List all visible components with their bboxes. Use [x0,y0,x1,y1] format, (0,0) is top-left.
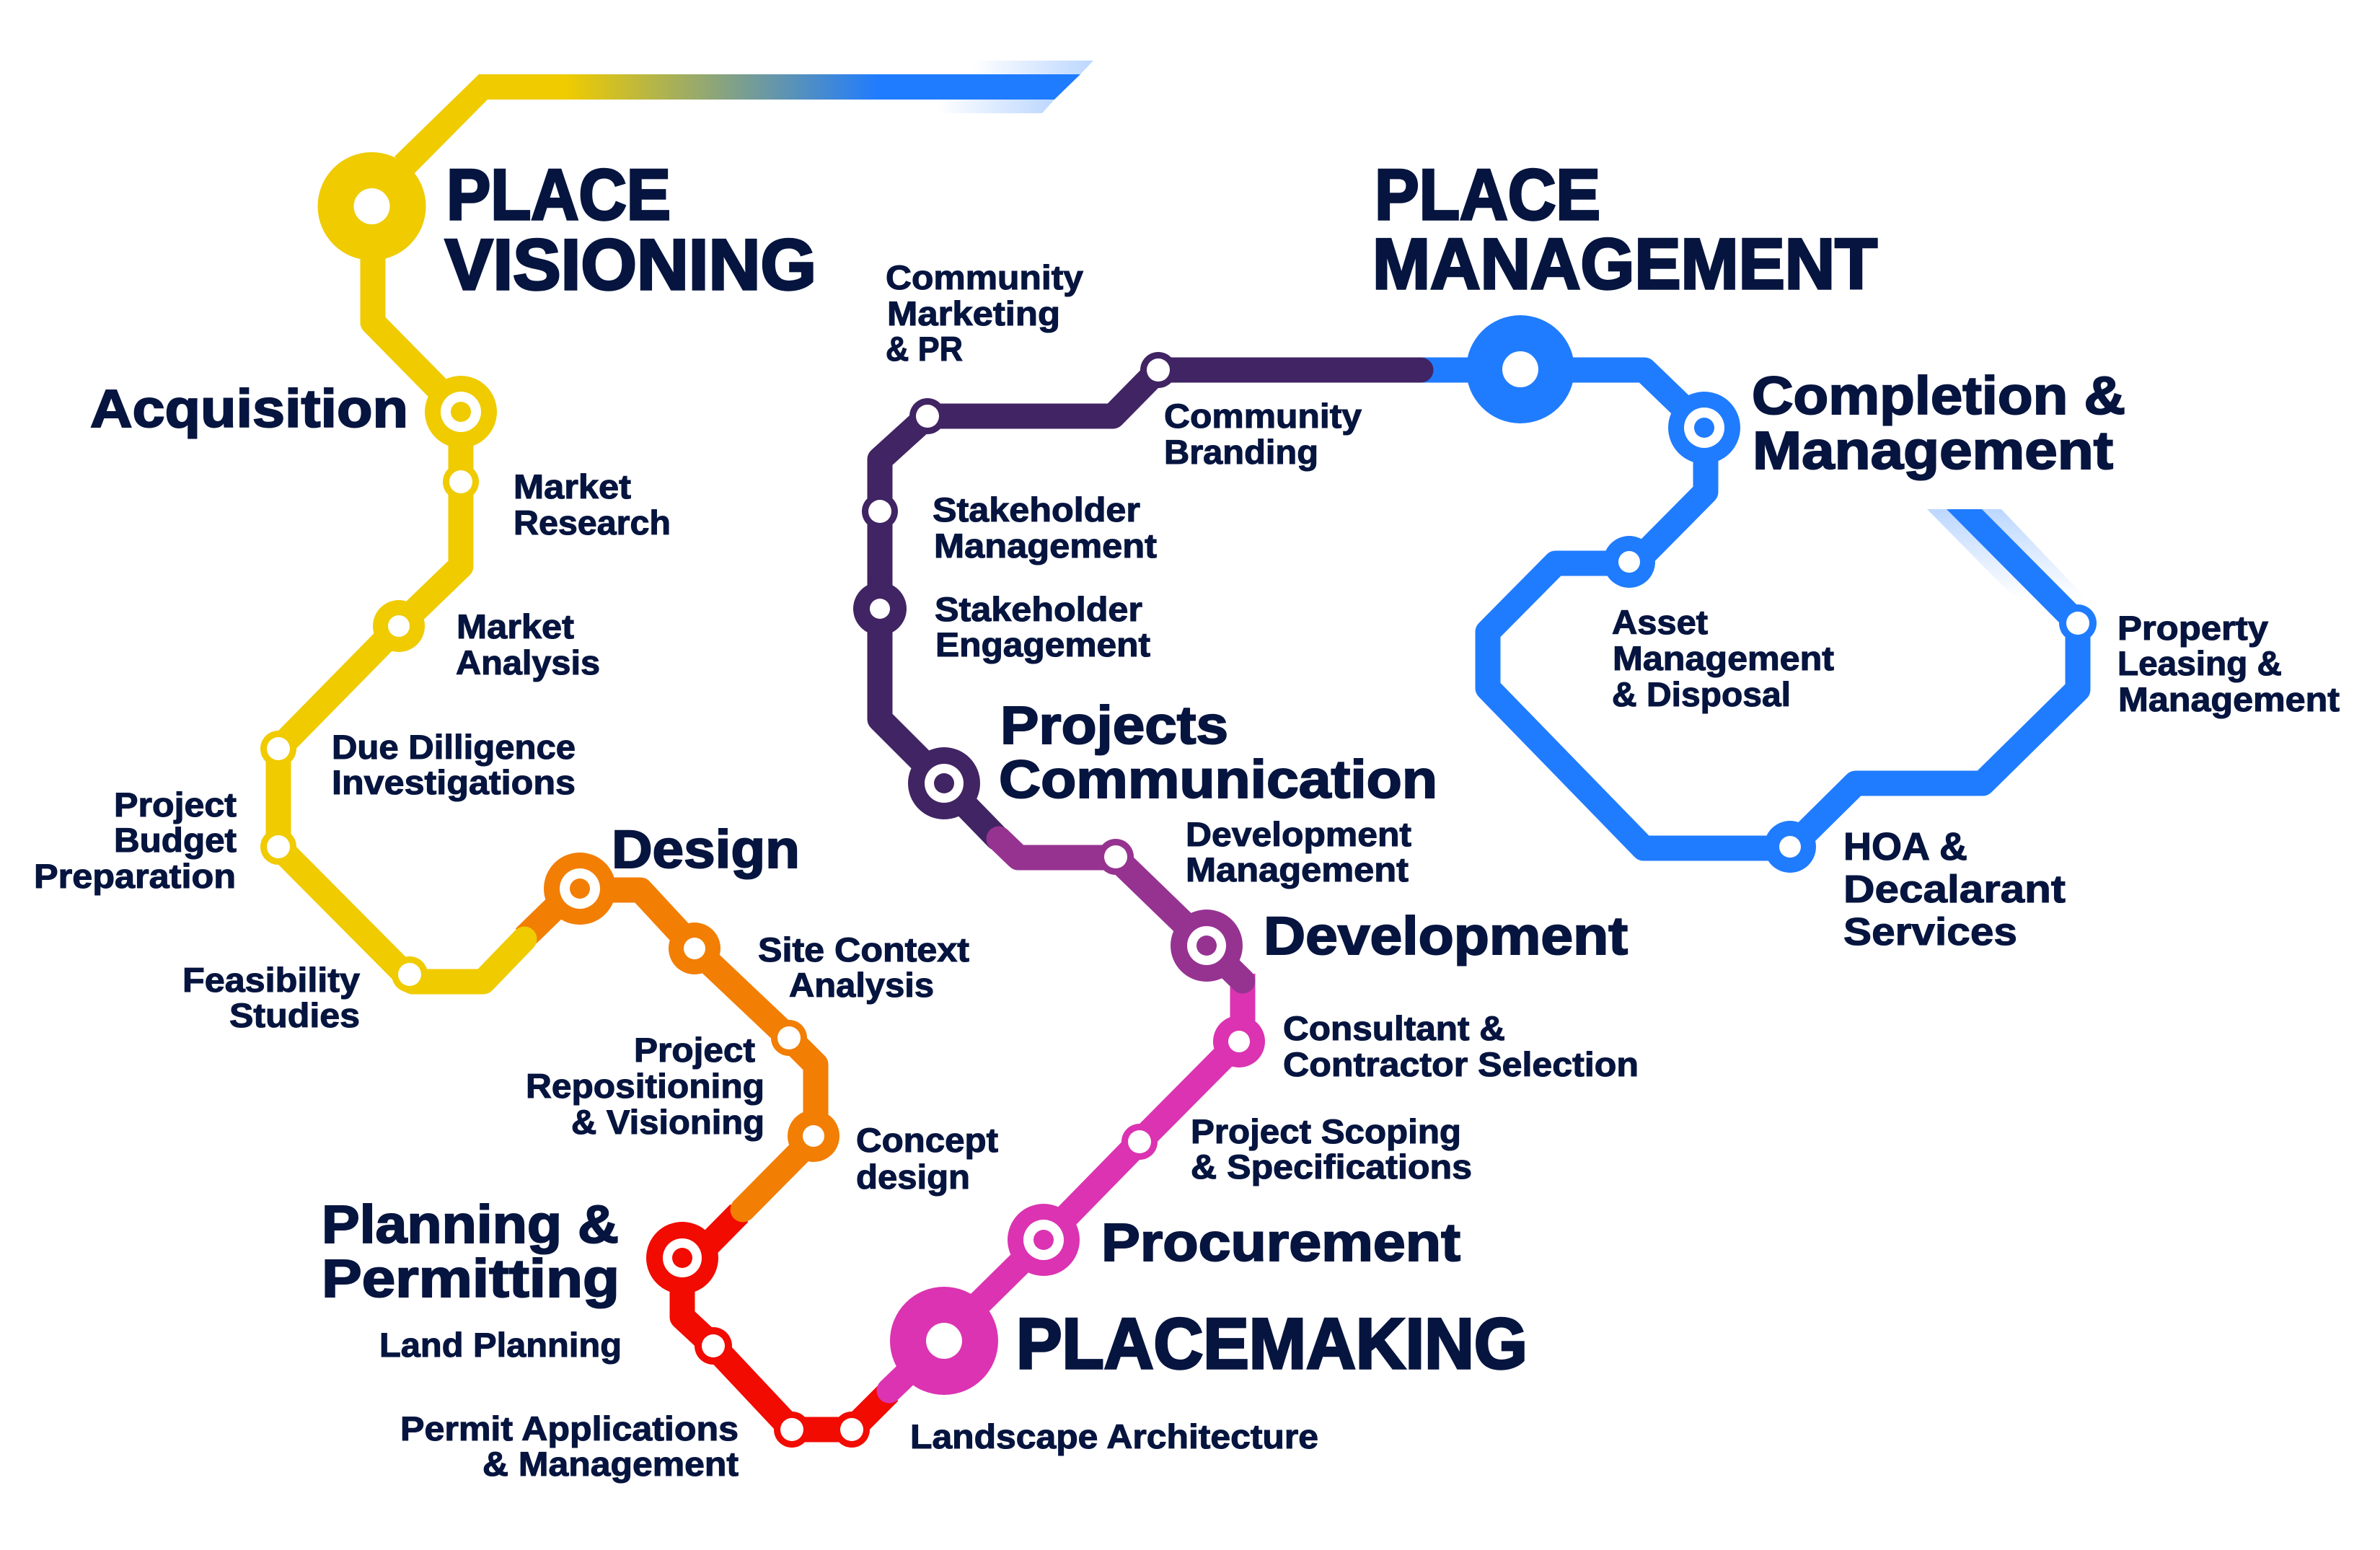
label: Site Context Analysis: Site Context [758,930,969,969]
label: Concept design: design [856,1158,970,1196]
label: Due Dilligence Investigations [332,728,576,801]
label: Feasibility Studies: Feasibility [182,961,360,999]
label: Market Analysis: Analysis [456,643,600,682]
label: Concept design: Concept [856,1121,998,1159]
station: Stakeholder Engagement [853,582,907,635]
heading: Place Visioning: PLACE [446,154,671,234]
label: HOA & Decalarant Services: HOA & [1843,825,1967,868]
label: Site Context Analysis: Analysis [789,966,934,1004]
label: Planning & Permitting [322,1194,620,1308]
label: Procurement: Procurement [1101,1212,1460,1272]
label: Stakeholder Management: Stakeholder [933,490,1140,529]
station: Project Repositioning [771,1020,807,1056]
label: Community Marketing & PR: Community [886,258,1083,296]
label: Stakeholder Engagement: Stakeholder [935,590,1142,628]
station: Feasibility Studies [392,956,428,992]
label: Due Dilligence Investigations: Investigations [332,763,576,801]
label: Community Marketing & PR [886,258,1083,368]
label: Development Management [1186,815,1411,889]
label: Projects Communication [999,695,1437,809]
red line: planning and permitting [646,1213,889,1448]
label: Project Scoping & Specifications: Project Scoping [1191,1112,1461,1150]
label: HOA & Decalarant Services: Decalarant [1843,868,2066,911]
label: Completion & Management: Completion & [1752,366,2125,426]
label: Stakeholder Management: Management [934,527,1157,565]
station: Market Analysis [373,600,425,652]
label: Project Budget Preparation: Preparation [34,857,236,895]
station: Project Budget [260,829,296,865]
label: Market Research: Research [514,503,671,542]
label: Completion & Management [1752,366,2125,480]
label: Market Research: Market [514,467,631,506]
station: Land Planning [695,1327,732,1365]
label: Project Budget Preparation: Project [114,785,237,824]
station: Site Context Analysis [669,922,720,974]
station: Place Visioning [317,152,426,260]
label: Project Budget Preparation: Budget [114,821,237,859]
blue line: place management [1414,315,2099,873]
label: Project Repositioning & Visioning: Repositioning [526,1067,764,1105]
label: Consultant & Contractor Selection: Contractor Selection [1283,1045,1639,1083]
label: Market Analysis [456,607,600,682]
label: Landscape Architecture: Landscape Architecture [910,1417,1318,1456]
yellow line: place visioning [260,61,1093,992]
station: Community Branding [1140,352,1176,388]
label: Property Leasing & Management: Leasing & [2117,644,2282,682]
station: Acquisition [425,376,497,448]
label: Feasibility Studies: Studies [229,996,360,1034]
label: Due Dilligence Investigations: Due Dilligence [332,728,576,766]
label: Development Management: Development [1186,815,1411,853]
heading: Place Visioning: VISIONING [445,224,816,304]
label: Projects Communication: Projects [1000,695,1228,755]
heading: Place Management: PLACE [1375,154,1600,234]
label: Site Context Analysis [758,930,969,1004]
label: Design: Design [612,819,800,879]
magenta line: placemaking [889,974,1265,1395]
label: Development: Development [1264,906,1628,966]
heading: Placemaking: PLACEMAKING [1016,1303,1528,1383]
heading: Place Management: MANAGEMENT [1372,224,1877,304]
label: Development Management: Management [1186,850,1409,889]
label: Project Scoping & Specifications: & Specifications [1191,1148,1472,1186]
label: Asset Management & Disposal: Asset [1612,603,1708,641]
station: Stakeholder Management [862,493,898,529]
label: Project Repositioning & Visioning: & Visioning [571,1103,764,1141]
label: Community Branding: Branding [1164,433,1318,471]
label: Completion & Management: Management [1753,420,2113,480]
label: Asset Management & Disposal: Management [1613,639,1834,677]
label: Consultant & Contractor Selection: Consultant & [1283,1009,1505,1047]
label: Permit Applications & Management: Permit Applications [400,1409,739,1448]
station: Landscape Architecture [834,1412,870,1448]
station: Development [1171,910,1243,982]
label: Community Marketing & PR: Marketing [887,294,1060,333]
label: Land Planning: Land Planning [379,1326,622,1364]
heading: Place Management [1372,154,1877,304]
station: Consultant Selection [1213,1016,1265,1067]
station: Placemaking [890,1287,998,1395]
heading: Place Visioning [445,154,816,304]
label: Consultant & Contractor Selection [1283,1009,1639,1083]
station: Planning & Permitting [646,1222,718,1294]
label: Project Repositioning & Visioning [526,1031,764,1141]
station: HOA & Decalarant Services [1764,821,1816,873]
station: Property Leasing [2059,604,2097,642]
station: Development Management [1098,839,1134,875]
label: Asset Management & Disposal [1612,603,1834,713]
label: Asset Management & Disposal: & Disposal [1612,675,1791,713]
label: Project Repositioning & Visioning: Project [634,1031,755,1069]
label: Concept design [856,1121,998,1196]
fading highlights at line start [937,61,1093,113]
label: Market Research [514,467,671,542]
label: Community Branding: Community [1164,397,1362,435]
label: Planning & Permitting: Permitting [322,1249,620,1308]
label: Stakeholder Management [933,490,1157,565]
dark purple line: projects communication [853,352,1421,838]
violet line: development [999,839,1243,982]
label: Feasibility Studies [182,961,360,1034]
label: Planning & Permitting: Planning & [322,1194,619,1254]
label: HOA & Decalarant Services: Services [1843,910,2017,954]
station: Procurement [1008,1204,1080,1276]
label: Property Leasing & Management [2117,609,2340,718]
label: Property Leasing & Management: Property [2117,609,2268,647]
label: Market Analysis: Market [457,607,574,646]
label: Projects Communication: Communication [999,749,1437,809]
label: Project Budget Preparation [34,785,237,895]
station: Due Dilligence [260,731,296,767]
fading highlights at line end [1927,509,2099,612]
station: Projects Communication [908,747,980,819]
station: Project Scoping [1121,1124,1158,1160]
orange line: design [524,853,839,1222]
label: Community Branding [1164,397,1362,471]
yellow to blue gradient line start [395,74,1080,173]
label: HOA & Decalarant Services [1843,825,2066,954]
label: Acquisition: Acquisition [90,379,408,439]
label: Stakeholder Engagement: Engagement [935,625,1150,664]
station: Permit Applications [774,1412,810,1448]
station: Design [544,853,616,925]
label: Project Scoping & Specifications [1191,1112,1472,1186]
station: Community Marketing [909,398,946,434]
station: Asset Management [1603,536,1655,588]
label: Stakeholder Engagement [935,590,1150,664]
label: Property Leasing & Management: Management [2118,680,2340,718]
label: Community Marketing & PR: & PR [886,330,963,368]
station: Concept design [788,1110,839,1162]
station: Completion & Management [1668,392,1740,464]
label: Permit Applications & Management: & Management [482,1445,739,1483]
station: Place Management [1466,315,1574,423]
label: Permit Applications & Management [400,1409,739,1483]
station: Market Research [443,464,479,500]
